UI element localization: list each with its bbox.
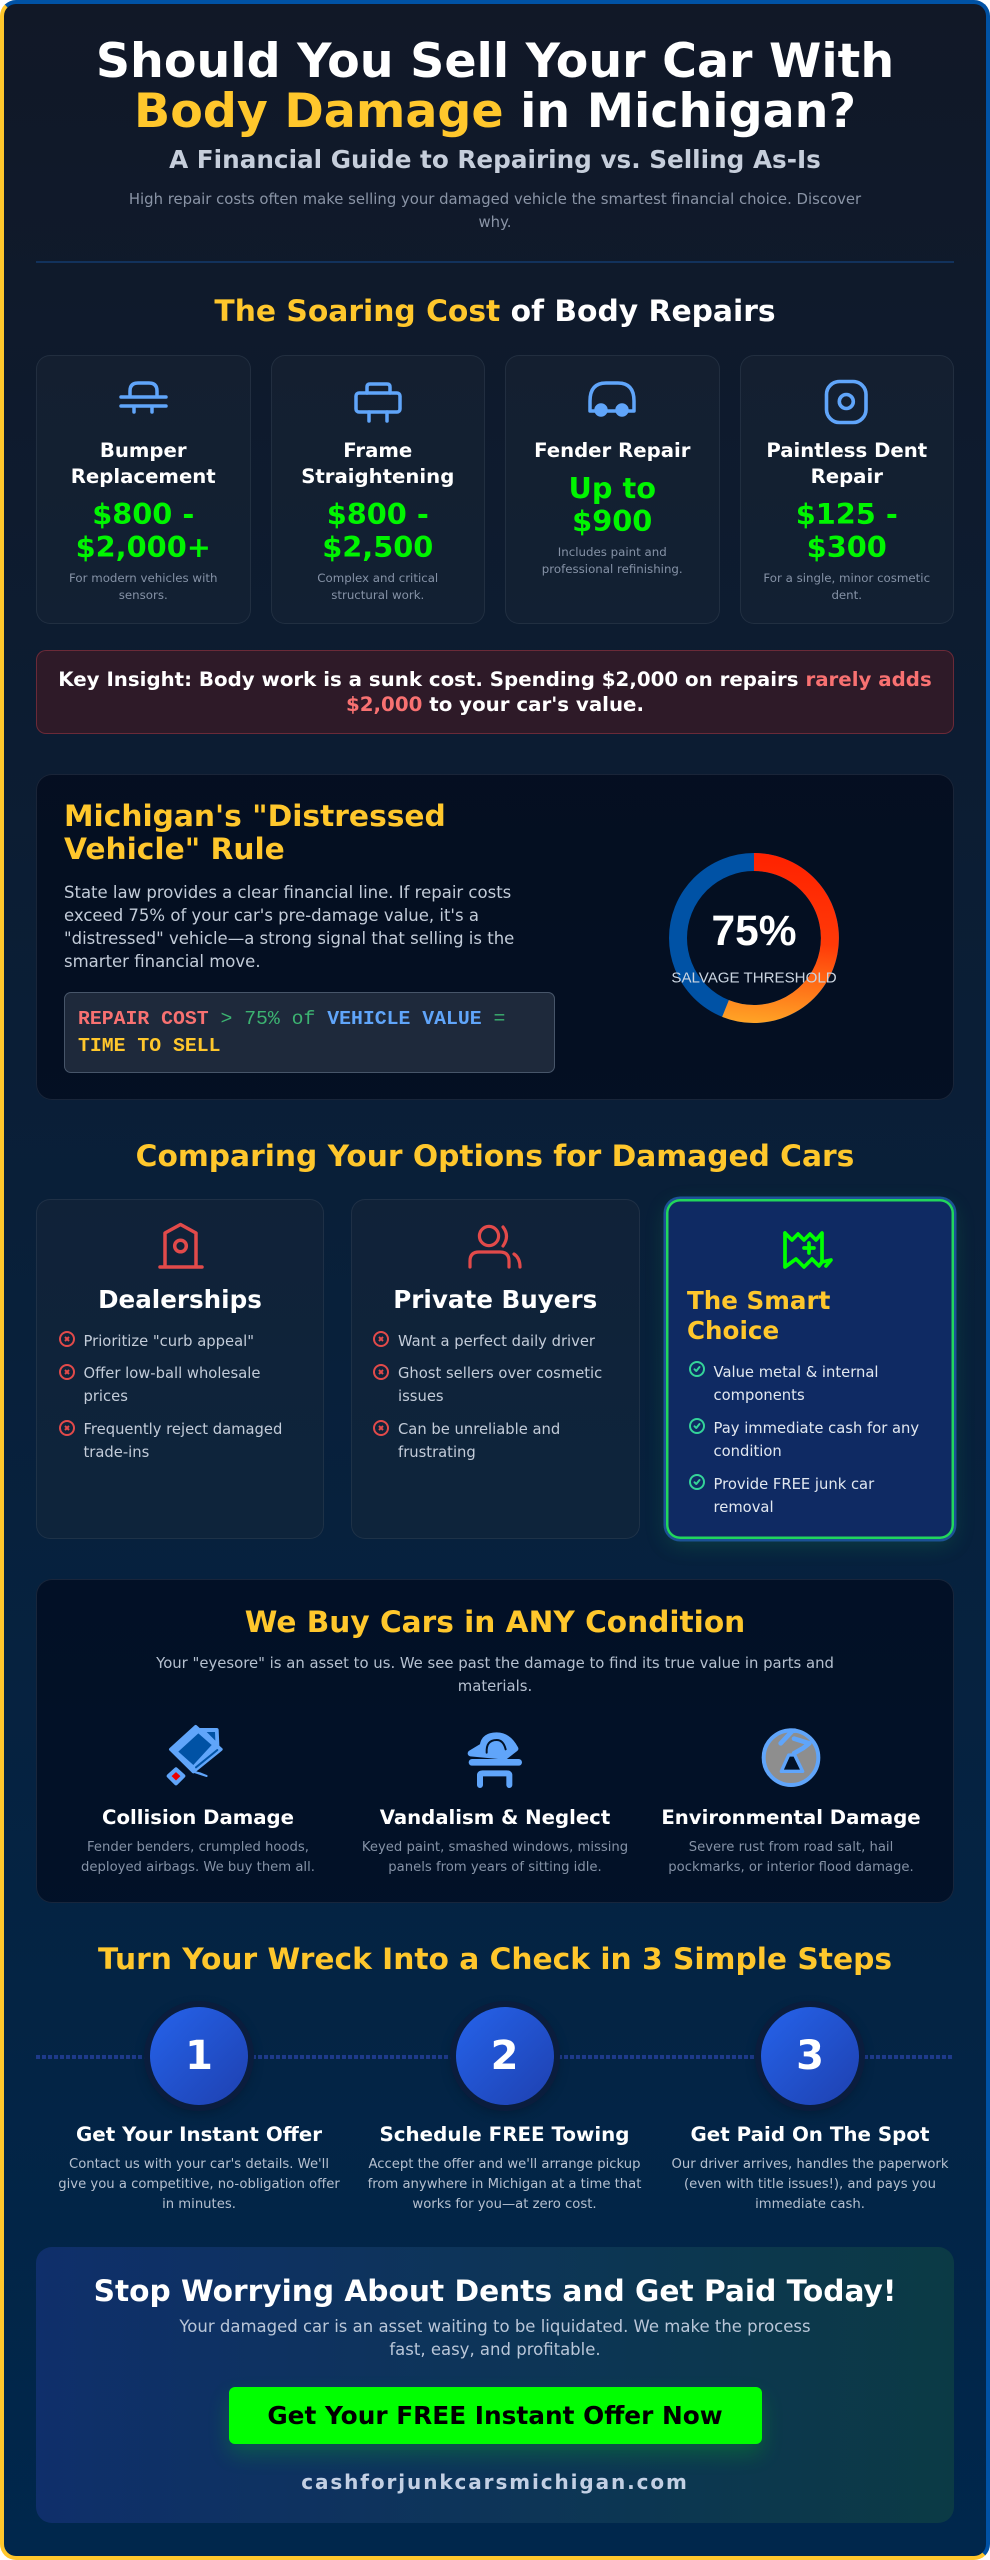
list item: issues [398,1388,444,1404]
card title: Bumper [100,438,187,462]
card title: Paintless Dent [766,438,927,462]
card title [766,438,927,488]
list item: Can be unreliable and [398,1420,560,1438]
list item [689,1474,874,1516]
body text [64,883,514,971]
heading: comparing options: Comparing Your Options for Damaged Cars [136,1139,854,1174]
list item [689,1418,919,1460]
step 1 text: in minutes. [162,2196,236,2212]
heading: We Buy Cars in ANY Condition [245,1605,745,1639]
item text: panels from years of sitting idle. [388,1860,602,1874]
list item: components [714,1386,805,1404]
step 1 number [150,2007,248,2105]
card title: Private Buyers [393,1284,597,1314]
list item: Provide FREE junk car [714,1476,874,1492]
title: Should You Sell Your Car With [96,34,894,89]
heading: soaring cost: The Soaring Cost of Body Repairs [214,294,776,329]
formula text [78,1008,505,1057]
list item: removal [714,1498,774,1516]
step 2 text: Accept the offer and we'll arrange pickup [369,2156,640,2172]
item title: Environmental Damage [661,1806,921,1829]
intro text: High repair costs often make selling your damaged vehicle the smartest financial choice. Discover [129,190,861,208]
insight text [58,668,932,716]
list item: Frequently reject damaged [84,1420,282,1438]
item text [643,1838,939,1878]
title: Body Damage in Michigan? [134,84,856,139]
panel: we buy cars in any condition [36,1579,954,1903]
body text: fast, easy, and profitable. [389,2340,601,2359]
heading: three steps: Turn Your Wreck Into a Check in 3 Simple Steps [98,1942,892,1977]
step 2 number [456,2007,554,2105]
intro text [129,190,862,231]
body text: State law provides a clear financial line. If repair costs [64,883,511,902]
donut chart: 75% salvage threshold: 75% [711,908,797,955]
step 2 number: 2 [491,2033,518,2079]
step 1 text [49,2154,349,2214]
title [96,34,894,139]
body text [36,2315,954,2361]
description: Includes paint and [558,545,667,559]
header [96,34,894,231]
step 1 title: Get Your Instant Offer [76,2123,322,2146]
list item [689,1361,879,1404]
insight text: Key Insight: Body work is a sunk cost. Spending $2,000 on repairs rarely adds [58,668,932,691]
step 2 text [354,2154,654,2214]
price [568,470,656,538]
price [322,496,433,564]
panel: call to action [36,2247,954,2523]
step 3 text: (even with title issues!), and pays you [684,2176,936,2192]
item text: pockmarks, or interior flood damage. [668,1860,914,1874]
item: environmental damage [643,1804,939,1884]
item text [347,1838,643,1878]
step 3 number [761,2007,859,2105]
panel: the smart choice [666,1199,954,1539]
step 2 text: from anywhere in Michigan at a time that [368,2176,641,2192]
list item: prices [84,1388,128,1404]
donut chart: 75% salvage threshold [669,853,839,1023]
panel: bumper replacement [36,355,250,624]
list item [373,1420,560,1460]
list item [59,1420,282,1460]
item text: Keyed paint, smashed windows, missing [362,1840,628,1854]
icon: vandalism [468,1732,522,1788]
description [763,571,930,602]
icon: fender [588,381,636,417]
description: For modern vehicles with [69,571,217,585]
formula text: REPAIR COST > 75% of VEHICLE VALUE = [78,1008,505,1030]
formula text: TIME TO SELL [78,1035,220,1057]
description [69,571,217,602]
card title [687,1286,830,1344]
step 3 text [660,2154,960,2214]
item title: Collision Damage [102,1806,294,1829]
heading: Michigan's "Distressed [64,799,446,834]
step 2 text: works for you—at zero cost. [412,2196,597,2212]
list item: condition [714,1442,782,1460]
price: $900 [572,504,652,538]
icon: people [468,1224,522,1269]
heading [64,799,446,867]
card title: Repair [811,465,883,488]
list item: Ghost sellers over cosmetic [398,1364,602,1382]
price: $800 - [327,496,429,530]
panel: dealerships [36,1199,324,1539]
description [317,571,438,602]
price: Up to [568,470,656,504]
heading: Vehicle" Rule [64,832,285,867]
panel: private buyers [351,1199,640,1539]
item text: Fender benders, crumpled hoods, [87,1840,309,1854]
icon: dent [824,380,868,424]
donut chart: 75% salvage threshold: SALVAGE THRESHOLD [671,970,837,986]
step 3 text: immediate cash. [755,2196,865,2212]
insight text: $2,000 to your car's value. [346,693,644,716]
step 3 title: Get Paid On The Spot [690,2123,930,2146]
item text [50,1838,346,1878]
button [228,2387,762,2444]
intro text: why. [478,213,511,231]
intro text: Your "eyesore" is an asset to us. We see past the damage to find its true value in parts and [156,1654,834,1672]
price: $300 [807,530,887,564]
list item: frustrating [398,1444,476,1460]
panel: paintless dent repair [740,355,954,624]
icon: dealership [158,1222,204,1269]
step 3 text: Our driver arrives, handles the paperwork [672,2156,948,2172]
icon: environmental [736,1710,826,1810]
website: cashforjunkcarsmichigan.com [301,2470,689,2494]
card title: Straightening [301,465,454,488]
list item: Pay immediate cash for any [714,1420,919,1436]
list item: Offer low-ball wholesale [84,1364,260,1382]
description: Complex and critical [317,571,438,585]
list item [59,1364,260,1404]
formula box [64,992,555,1073]
card title: Dealerships [98,1284,262,1314]
card title: The Smart [687,1286,830,1314]
price: $125 - [796,496,898,530]
item text: deployed airbags. We buy them all. [81,1860,315,1874]
callout: key insight [36,650,954,734]
price [76,496,211,564]
item: collision damage [50,1804,346,1884]
subtitle: A Financial Guide to Repairing vs. Selling As-Is [169,145,821,174]
intro text [156,1654,834,1695]
price: $2,000+ [76,530,211,564]
panel: Michigan distressed vehicle rule [36,774,954,1100]
description: dent. [831,588,862,602]
card title: Replacement [71,465,216,488]
step 1 text: Contact us with your car's details. We'll [69,2156,329,2172]
description: structural work. [331,588,424,602]
price [796,496,898,564]
panel: fender repair [505,355,720,624]
heading: Stop Worrying About Dents and Get Paid Today! [94,2273,896,2308]
card title: Frame [343,438,412,462]
step 3 number: 3 [796,2033,824,2079]
description: For a single, minor cosmetic [763,571,930,585]
item text: Severe rust from road salt, hail [689,1840,893,1854]
body text: "distressed" vehicle—a strong signal that selling is the [64,929,514,948]
card title [71,438,216,488]
price: $800 - [92,496,194,530]
step 1 number: 1 [185,2033,213,2079]
button: Get Your FREE Instant Offer Now [267,2401,723,2430]
card title [301,438,454,488]
icon: collision [166,1724,223,1786]
step 1 text: give you a competitive, no-obligation offer [58,2176,340,2192]
description: sensors. [119,588,168,602]
item title: Vandalism & Neglect [380,1806,610,1829]
icon: bumper [119,381,168,414]
item: vandalism and neglect [347,1804,643,1884]
list item: Value metal & internal [714,1364,879,1380]
body text: Your damaged car is an asset waiting to be liquidated. We make the process [179,2317,811,2336]
description: professional refinishing. [542,562,683,576]
price: $2,500 [322,530,433,564]
list item [373,1364,602,1404]
intro text: materials. [458,1677,532,1695]
body text: smarter financial move. [64,952,261,971]
icon: frame [354,382,402,423]
icon: receipt with plus [783,1231,833,1269]
list item: trade-ins [84,1444,149,1460]
card title: Choice [687,1316,779,1344]
list item: Want a perfect daily driver [398,1332,595,1350]
list item: Prioritize "curb appeal" [84,1332,254,1350]
card title: Fender Repair [534,438,690,462]
panel: frame straightening [270,355,485,624]
body text: exceed 75% of your car's pre-damage value, it's a [64,906,479,925]
step 2 title: Schedule FREE Towing [380,2123,630,2146]
description [542,545,683,576]
